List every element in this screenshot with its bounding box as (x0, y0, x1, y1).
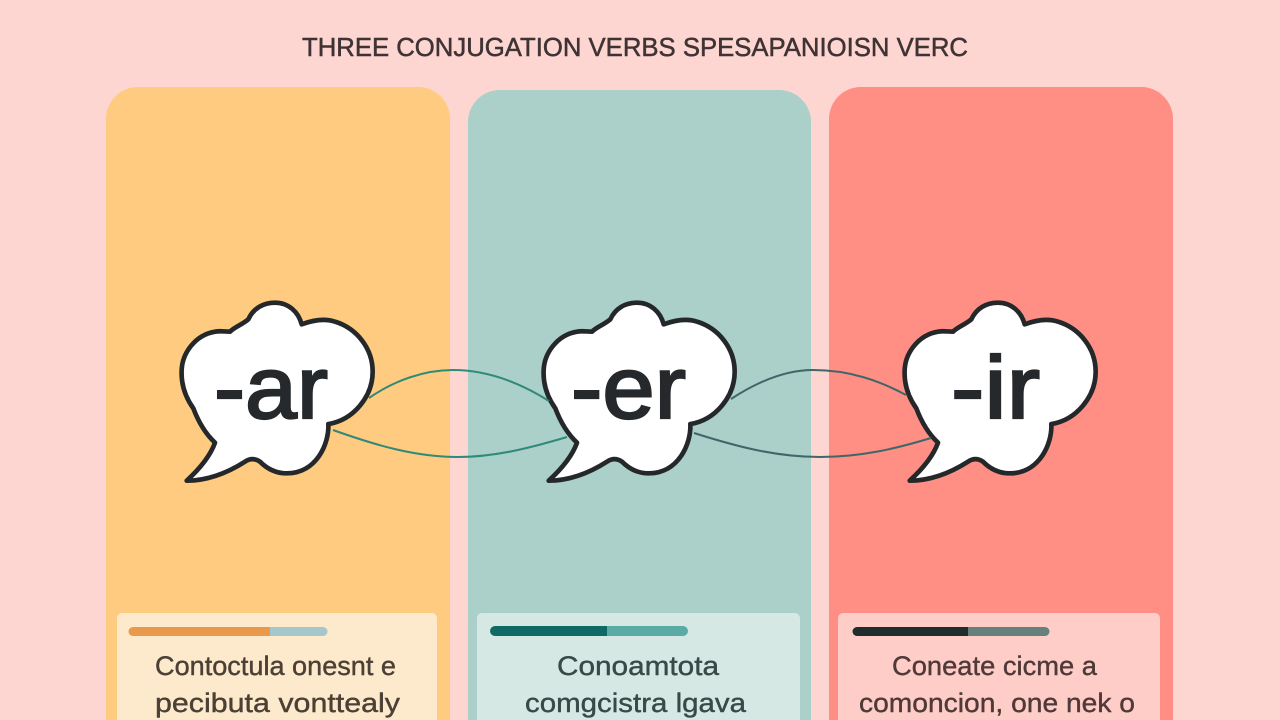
speech bubble: -ir: -ir (951, 338, 1040, 437)
card text: -ir: comoncion, one nek o (859, 688, 1135, 718)
card text: -ir: Coneate cicme a (892, 651, 1098, 681)
speech bubble: -ir (905, 303, 1096, 481)
text card: -er (477, 613, 800, 720)
card text: -ar: Contoctula onesnt e (155, 651, 396, 681)
card text: -er: Conoamtota (557, 651, 720, 681)
card text: -er (525, 651, 747, 718)
text card: -ir (838, 613, 1160, 720)
title: THREE CONJUGATION VERBS SPESAPANIOISN VERC (302, 32, 968, 62)
card text: -ar: pecibuta vonttealy (155, 688, 401, 718)
progress bar: -ir (852, 627, 1050, 636)
speech bubble: -ar: -ar (214, 338, 328, 437)
text card: -ar (117, 613, 437, 720)
speech bubble: -er: -er (571, 338, 686, 437)
panel: -ir (829, 87, 1173, 720)
speech bubble: -er (544, 303, 735, 481)
progress bar: -er (490, 626, 688, 636)
panel: -er (468, 90, 811, 720)
connectors: -er to -ir (694, 370, 931, 457)
progress bar: -ar (128, 627, 328, 636)
connectors: -ar to -er (333, 370, 567, 457)
card text: -ir (859, 651, 1135, 718)
card text: -er: comgcistra lgava (525, 688, 747, 718)
card text: -ar (155, 651, 401, 718)
panel: -ar (106, 87, 450, 720)
speech bubble: -ar (182, 303, 373, 481)
